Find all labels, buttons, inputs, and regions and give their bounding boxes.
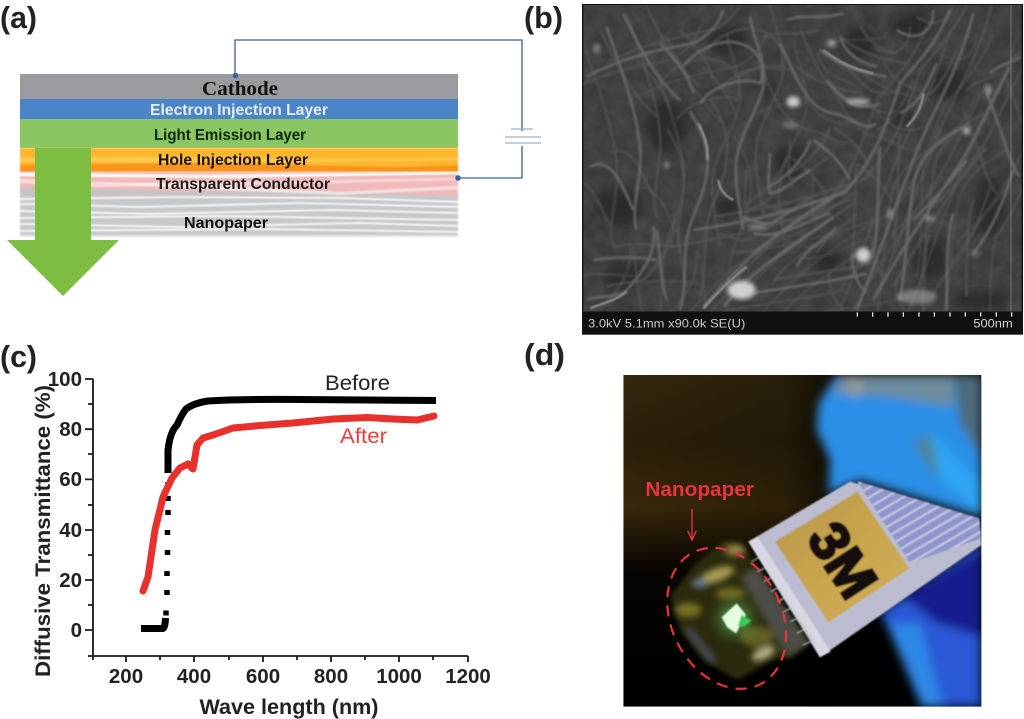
y tick labels: 20 [59, 569, 82, 592]
y tick labels: 100 [48, 368, 82, 391]
x tick labels [109, 665, 491, 688]
contact dot: conductor [455, 175, 461, 181]
scale text: 500nm [973, 318, 1013, 331]
micrograph frame [582, 4, 1023, 335]
text: Nanopaper: Nanopaper [184, 215, 268, 232]
y tick labels [48, 368, 82, 642]
layer: cathode [20, 74, 458, 99]
label: panel b: (b) [524, 0, 563, 35]
text: Electron Injection Layer: Electron Injection Layer [150, 102, 328, 119]
panel: SEM micrograph [563, 0, 1024, 335]
y tick labels: 60 [59, 468, 82, 491]
y tick labels: 0 [71, 619, 82, 642]
x tick labels: 1200 [445, 665, 491, 688]
data bar [583, 312, 1023, 334]
text: Transparent Conductor: Transparent Conductor [156, 176, 330, 193]
ribbon cable [748, 480, 982, 658]
curve: after [143, 416, 434, 591]
micrograph info text: 3.0kV 5.1mm x90.0k SE(U) [588, 318, 745, 331]
panel: OLED layer diagram [7, 40, 541, 296]
text: Hole Injection Layer: Hole Injection Layer [158, 152, 308, 169]
layer: transparent conductor [20, 172, 458, 198]
circuit wire [235, 40, 522, 178]
ribbon stripes [858, 481, 981, 564]
dashed highlight ellipse [666, 546, 788, 690]
text: Light Emission Layer: Light Emission Layer [154, 127, 306, 144]
y axis title: Diffusive Transmittance (%) [32, 385, 55, 677]
x axis title: Wave length (nm) [200, 696, 378, 719]
flexible device [670, 540, 810, 680]
callout text: Nanopaper [645, 479, 754, 501]
connector teeth [752, 557, 814, 645]
label: panel c: (c) [0, 339, 37, 374]
layer: hole injection [20, 148, 458, 172]
layer: electron injection [20, 99, 458, 119]
callout arrow [688, 509, 696, 540]
micrograph fibres [583, 5, 1022, 312]
glove [817, 375, 981, 707]
text: Cathode: Cathode [202, 78, 278, 100]
emitted light arrow [7, 148, 119, 296]
legend: Before: Before [325, 372, 390, 395]
x tick labels: 1000 [376, 665, 422, 688]
curve: before [141, 399, 436, 628]
photo background [623, 375, 981, 707]
x tick labels: 400 [177, 665, 211, 688]
x tick labels: 600 [246, 665, 280, 688]
x tick labels: 200 [109, 665, 143, 688]
scale ticks [857, 312, 1012, 317]
axes and ticks [85, 379, 468, 662]
contact dot: cathode [233, 73, 238, 78]
battery symbol [505, 129, 541, 143]
panel: device photograph [623, 375, 981, 709]
layer: nanopaper [20, 196, 458, 237]
label: panel a: (a) [0, 0, 37, 35]
gold label [775, 492, 909, 622]
legend: After: After [340, 425, 387, 448]
chart: diffusive transmittance [32, 368, 491, 719]
emission glow [718, 602, 752, 635]
y tick labels: 40 [59, 519, 82, 542]
x tick labels: 800 [314, 665, 348, 688]
label: panel d: (d) [524, 337, 565, 372]
3M logo: 3M [796, 511, 889, 609]
layer: light emission [20, 119, 458, 148]
y tick labels: 80 [59, 418, 82, 441]
